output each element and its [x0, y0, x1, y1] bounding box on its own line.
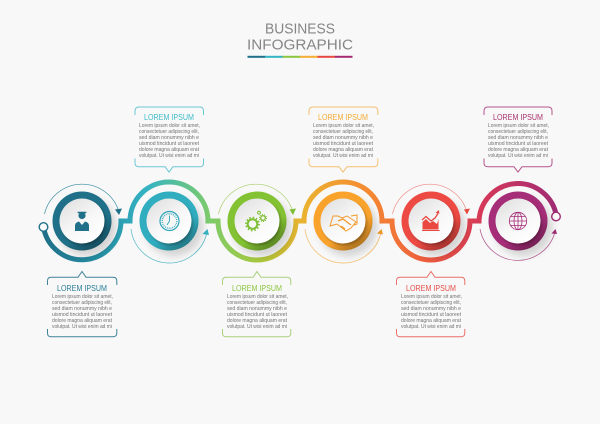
callout 6: uismod tincidunt ut laoreet	[488, 141, 548, 147]
callout 6: consectetuer adipiscing elit,	[488, 129, 548, 135]
icon: businessman	[75, 212, 89, 231]
ribbon timeline	[39, 182, 560, 260]
callout 4: consectetuer adipiscing elit,	[313, 129, 373, 135]
step 1 circle	[44, 184, 122, 256]
callout 3: volutpat. Ut wisi enim ad mi	[227, 324, 287, 330]
callout 6: dolore magna aliquam erat	[488, 147, 548, 153]
callout 2: volutpat. Ut wisi enim ad mi	[139, 153, 199, 159]
callout 5: consectetuer adipiscing elit,	[401, 300, 461, 306]
callout 5: Lorem ipsum dolor sit amet,	[401, 294, 462, 300]
callout 2: consectetuer adipiscing elit,	[139, 129, 199, 135]
callout 5: sed diam nonummy nibh e	[401, 306, 461, 312]
callout 4: Lorem ipsum dolor sit amet,	[313, 123, 374, 129]
callout 1: LOREM IPSUM	[57, 284, 107, 293]
step 6 circle	[480, 192, 557, 260]
callout 6: Lorem ipsum dolor sit amet,	[488, 123, 549, 129]
callout 3: sed diam nonummy nibh e	[227, 306, 287, 312]
title: BUSINESS	[265, 22, 335, 38]
step 2 circle	[131, 192, 209, 263]
callout 3: dolore magna aliquam erat	[227, 318, 287, 324]
callout 2	[135, 107, 204, 172]
callout 4: LOREM IPSUM	[318, 113, 368, 122]
step 3 circle	[218, 184, 296, 256]
callout 1	[48, 272, 117, 337]
callout 6: sed diam nonummy nibh e	[488, 135, 548, 141]
callout 2: uismod tincidunt ut laoreet	[139, 141, 199, 147]
callout 5: LOREM IPSUM	[406, 284, 456, 293]
callout 2: dolore magna aliquam erat	[139, 147, 199, 153]
callout 1: uismod tincidunt ut laoreet	[52, 312, 112, 318]
icon: growth chart	[422, 210, 440, 230]
callout 3: consectetuer adipiscing elit,	[227, 300, 287, 306]
callout 2: LOREM IPSUM	[144, 113, 194, 122]
callout 1: consectetuer adipiscing elit,	[52, 300, 112, 306]
callout 2: sed diam nonummy nibh e	[139, 135, 199, 141]
callout 1: sed diam nonummy nibh e	[52, 306, 112, 312]
callout 4: dolore magna aliquam erat	[313, 147, 373, 153]
callout 6	[484, 107, 552, 172]
callout 4: uismod tincidunt ut laoreet	[313, 141, 373, 147]
callout 6: LOREM IPSUM	[493, 113, 543, 122]
callout 4: volutpat. Ut wisi enim ad mi	[313, 153, 373, 159]
callout 1: dolore magna aliquam erat	[52, 318, 112, 324]
step 5 circle	[392, 184, 470, 256]
title underline	[248, 56, 352, 58]
callout 3: Lorem ipsum dolor sit amet,	[227, 294, 288, 300]
callout 4: sed diam nonummy nibh e	[313, 135, 373, 141]
callout 4	[309, 107, 378, 172]
icon: handshake	[330, 215, 357, 231]
callout 5	[396, 272, 465, 337]
title	[247, 22, 353, 54]
step 4 circle	[305, 192, 383, 263]
callout 1: Lorem ipsum dolor sit amet,	[52, 294, 113, 300]
icon: globe	[509, 212, 527, 230]
callout 5: volutpat. Ut wisi enim ad mi	[401, 324, 461, 330]
callout 5: uismod tincidunt ut laoreet	[401, 312, 461, 318]
callout 3: uismod tincidunt ut laoreet	[227, 312, 287, 318]
title: INFOGRAPHIC	[247, 38, 353, 54]
callout 3: LOREM IPSUM	[232, 284, 282, 293]
callout 5: dolore magna aliquam erat	[401, 318, 461, 324]
callout 3	[222, 272, 291, 337]
icon: gears	[246, 211, 266, 230]
callout 1: volutpat. Ut wisi enim ad mi	[52, 324, 112, 330]
icon: clock	[160, 212, 179, 230]
callout 2: Lorem ipsum dolor sit amet,	[139, 123, 200, 129]
callout 6: volutpat. Ut wisi enim ad mi	[488, 153, 548, 159]
